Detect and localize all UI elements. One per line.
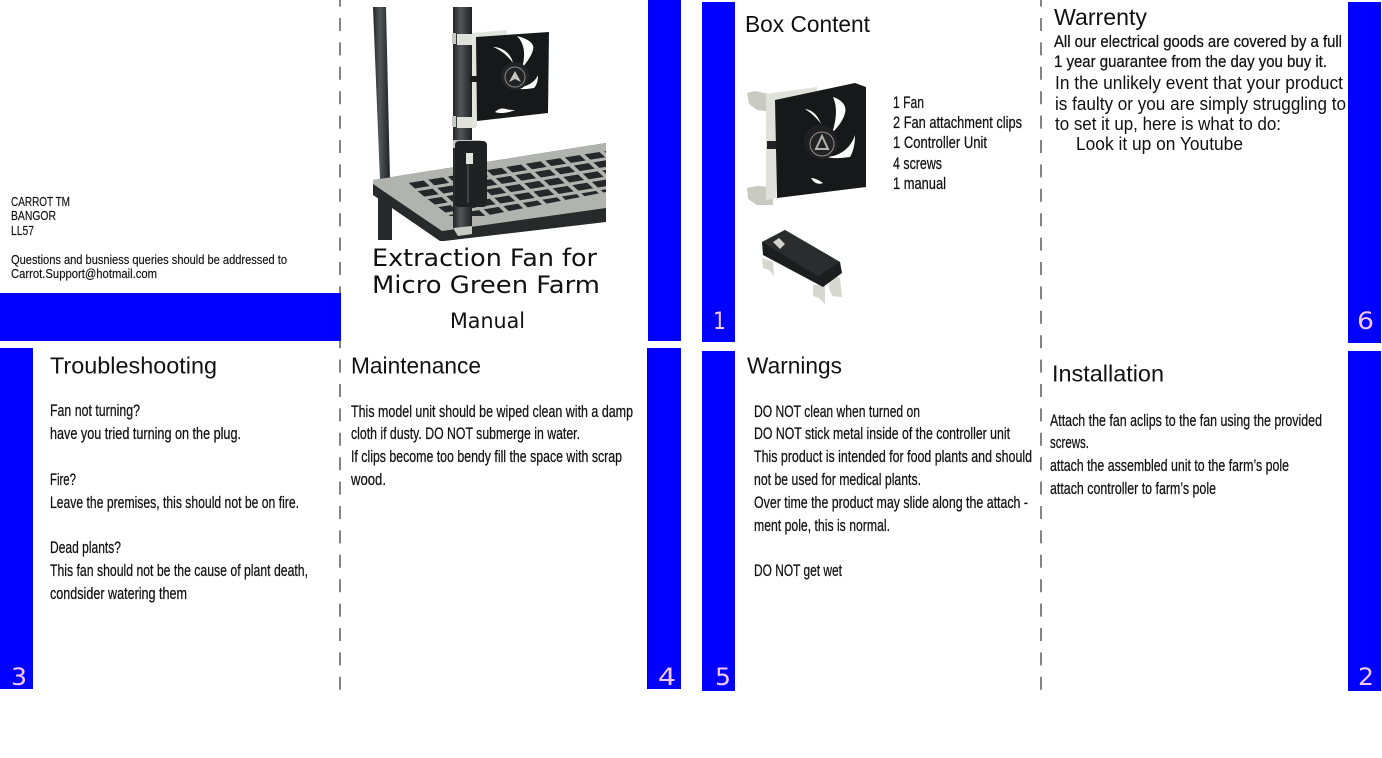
text block: box contents list: 1 Controller Unit <box>893 133 987 152</box>
text block: warranty details: In the unlikely event that your product <box>1055 73 1343 93</box>
text block: warnings: DO NOT stick metal inside of the controller unit <box>754 424 1010 443</box>
text block: troubleshooting: Fan not turning? <box>50 401 140 420</box>
panel: blue strip page 6 <box>1348 2 1381 343</box>
text block: troubleshooting: condsider watering them <box>50 584 187 603</box>
panel: blue strip page 2: 2 <box>1358 663 1374 691</box>
panel: blue strip page 3: 3 <box>11 663 27 691</box>
text block: box contents list: 1 Fan <box>893 93 924 112</box>
title: product name: Micro Green Farm <box>372 271 600 299</box>
text block: maintenance <box>350 402 633 489</box>
text block: box contents list <box>893 93 1022 193</box>
text block: warranty details: Look it up on Youtube <box>1076 134 1243 154</box>
illustration: fan mounted on farm pole and shelf <box>373 7 606 241</box>
text block: warnings: not be used for medical plants. <box>754 470 921 489</box>
text block: company address: Carrot.Support@hotmail.com <box>11 267 157 281</box>
text block: box contents list: 1 manual <box>893 174 946 193</box>
panel: blue strip page 2 <box>1348 351 1381 691</box>
icon: fan with clips <box>747 83 866 205</box>
text block: box contents list: 4 screws <box>893 154 942 173</box>
text block: warnings: DO NOT get wet <box>754 561 842 580</box>
text block: installation: screws. <box>1050 433 1089 452</box>
text block: warnings: This product is intended for food plants and should <box>754 447 1032 466</box>
heading: installation: Installation <box>1052 360 1164 386</box>
panel: blue strip page 1: 1 <box>713 307 726 335</box>
panel: blue strip page 6: 6 <box>1357 307 1374 335</box>
text block: troubleshooting: This fan should not be the cause of plant death, <box>50 561 308 580</box>
text block: warranty details: is faulty or you are simply struggling to <box>1055 94 1346 114</box>
text block: maintenance: This model unit should be wiped clean with a damp <box>351 402 633 421</box>
text block: company address: LL57 <box>11 224 34 238</box>
text block: company address: CARROT TM <box>11 195 70 209</box>
heading: maintenance: Maintenance <box>351 352 481 378</box>
text block: company address: Questions and busniess queries should be addressed to <box>11 253 287 267</box>
text block: maintenance: wood. <box>350 470 386 489</box>
text block: warranty details: to set it up, here is what to do: <box>1055 114 1281 134</box>
title: product name: Extraction Fan for <box>372 244 597 272</box>
text block: warnings <box>754 402 1032 580</box>
text block: maintenance: cloth if dusty. DO NOT submerge in water. <box>351 424 580 443</box>
panel: blue strip page 4: 4 <box>658 663 676 691</box>
panel: blue band back cover <box>0 293 341 341</box>
text block: warnings: ment pole, this is normal. <box>754 516 890 535</box>
text block: warnings: DO NOT clean when turned on <box>754 402 920 421</box>
text block: installation: attach controller to farm’s pole <box>1050 479 1216 498</box>
heading: troubleshooting: Troubleshooting <box>50 352 217 378</box>
panel: blue strip page 5 <box>702 351 735 691</box>
text block: warnings: Over time the product may slide along the attach - <box>754 493 1028 512</box>
text block: troubleshooting: Fire? <box>50 470 76 489</box>
panel: blue strip page 3 <box>0 348 33 691</box>
text block: warranty details <box>1054 32 1346 154</box>
title: product name <box>372 244 600 299</box>
subtitle: manual: Manual <box>450 309 525 333</box>
text block: troubleshooting: Dead plants? <box>50 538 121 557</box>
text block: installation: attach the assembled unit to the farm’s pole <box>1050 456 1289 475</box>
text block: troubleshooting <box>50 401 308 603</box>
text block: company address: BANGOR <box>11 209 56 223</box>
text block: installation <box>1050 411 1322 498</box>
heading: warrenty: Warrenty <box>1054 4 1147 30</box>
text block: troubleshooting: Leave the premises, this should not be on fire. <box>50 493 299 512</box>
panel: blue strip page 4 <box>647 348 681 691</box>
panel: blue strip page 5: 5 <box>715 663 731 691</box>
panel: blue strip page 1 <box>702 2 735 342</box>
text block: maintenance: If clips become too bendy fill the space with scrap <box>351 447 622 466</box>
icon: controller unit <box>762 230 842 304</box>
text block: company address <box>11 195 287 281</box>
panel: blue strip top cover <box>648 0 681 341</box>
heading: warnings: Warnings <box>747 352 842 378</box>
heading: box content: Box Content <box>745 11 870 37</box>
text block: warranty details: 1 year guarantee from the day you buy it. <box>1054 52 1327 71</box>
text block: warranty details: All our electrical goods are covered by a full <box>1054 32 1342 51</box>
text block: troubleshooting: have you tried turning on the plug. <box>50 424 241 443</box>
text block: box contents list: 2 Fan attachment clips <box>893 113 1022 132</box>
